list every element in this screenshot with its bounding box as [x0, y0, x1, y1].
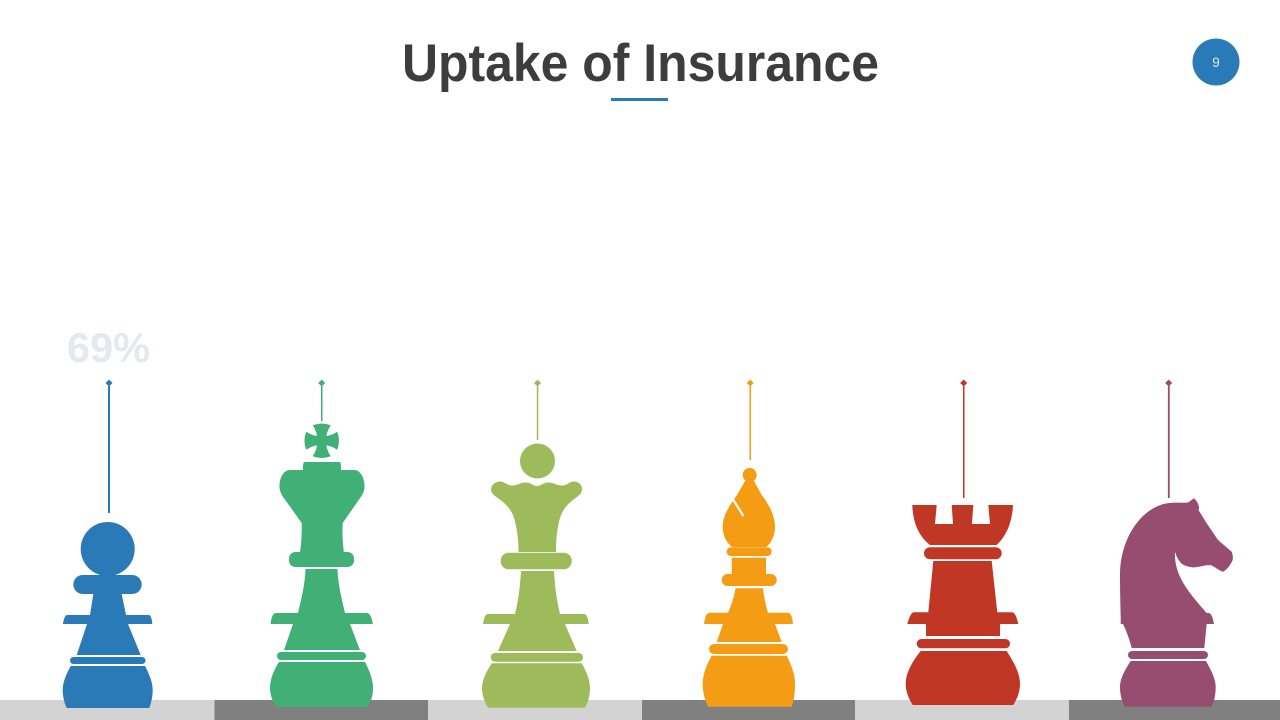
pawn piece: [63, 522, 153, 708]
percentage label: 69%: [67, 324, 150, 371]
pointer line: bishop: [747, 380, 754, 460]
pointer line: pawn: [106, 380, 112, 513]
queen column: [482, 380, 590, 708]
knight column: [1120, 380, 1233, 707]
rook column: [906, 380, 1020, 705]
pointer line: king: [318, 380, 325, 421]
knight piece: [1120, 498, 1233, 707]
pointer line: queen: [534, 380, 541, 440]
king column: [270, 380, 373, 707]
pointer line: rook: [960, 380, 967, 498]
title underline: [611, 98, 668, 101]
queen ball: [520, 444, 555, 478]
queen piece: [482, 482, 590, 708]
king piece: [270, 462, 373, 707]
pointer line: knight: [1165, 380, 1172, 498]
page number badge: 9: [1212, 55, 1220, 70]
pawn column: [63, 380, 153, 708]
floor strip: [0, 700, 1280, 720]
title: Uptake of Insurance: [402, 34, 879, 93]
bishop piece: [703, 468, 795, 707]
bishop column: [703, 380, 795, 707]
page number badge: [1192, 38, 1240, 86]
king cross: [304, 423, 339, 458]
rook piece: [906, 505, 1020, 705]
